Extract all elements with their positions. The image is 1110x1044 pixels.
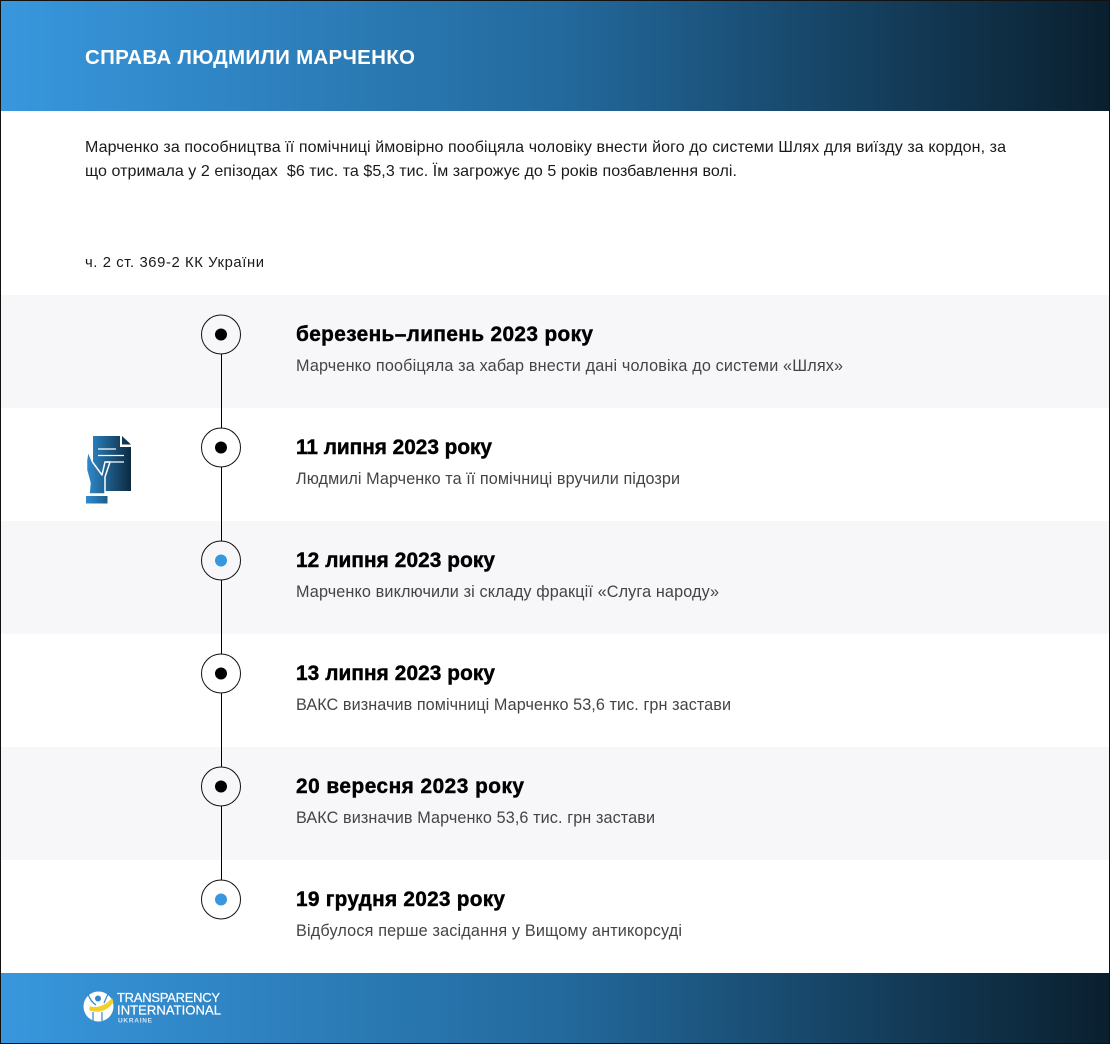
timeline row 2: Людмилі Марченко та її помічниці вручили підозри xyxy=(296,470,680,488)
timeline row 5: ВАКС визначив Марченко 53,6 тис. грн застави xyxy=(296,809,655,827)
timeline row 2 xyxy=(202,428,680,488)
header band xyxy=(0,0,1110,111)
row backgrounds xyxy=(0,295,1110,860)
legal article: ч. 2 ст. 369-2 КК України xyxy=(85,255,264,271)
timeline row 6 xyxy=(202,880,682,940)
timeline row 1 xyxy=(202,315,843,375)
timeline row 5: 20 вересня 2023 року xyxy=(296,775,524,798)
timeline row 6: 19 грудня 2023 року xyxy=(296,888,505,911)
logo: Transparency International Ukraine: TRANSPARENCY xyxy=(117,990,220,1005)
intro text xyxy=(85,139,1006,180)
title: СПРАВА ЛЮДМИЛИ МАРЧЕНКО xyxy=(85,46,415,69)
timeline row 3: Марченко виключили зі складу фракції «Слуга народу» xyxy=(296,583,719,601)
timeline row 4: 13 липня 2023 року xyxy=(296,662,495,685)
timeline row 3 xyxy=(202,541,719,601)
icon: hand holding document xyxy=(86,436,131,504)
timeline row 4: ВАКС визначив помічниці Марченко 53,6 тис. грн застави xyxy=(296,696,731,714)
logo: Transparency International Ukraine xyxy=(84,990,221,1024)
timeline row 5 xyxy=(202,767,655,827)
logo: Transparency International Ukraine: UKRAINE xyxy=(118,1018,153,1024)
logo: Transparency International Ukraine: INTERNATIONAL xyxy=(117,1002,221,1018)
timeline row 3: 12 липня 2023 року xyxy=(296,549,495,572)
intro text: Марченко за пособництва її помічниці ймовірно пообіцяла чоловіку внести його до системи Шлях для виїзду за кордон, за xyxy=(85,139,1006,156)
intro text: що отримала у 2 епізодах $6 тис. та $5,3 тис. Їм загрожує до 5 років позбавлення волі. xyxy=(85,162,737,180)
timeline row 1: березень–липень 2023 року xyxy=(296,323,593,346)
footer band xyxy=(0,973,1110,1044)
timeline row 2: 11 липня 2023 року xyxy=(296,436,492,459)
timeline row 1: Марченко пообіцяла за хабар внести дані чоловіка до системи «Шлях» xyxy=(296,357,843,375)
timeline line xyxy=(220,334,222,900)
timeline row 4 xyxy=(202,654,731,714)
timeline row 6: Відбулося перше засідання у Вищому антикорсуді xyxy=(296,922,682,940)
